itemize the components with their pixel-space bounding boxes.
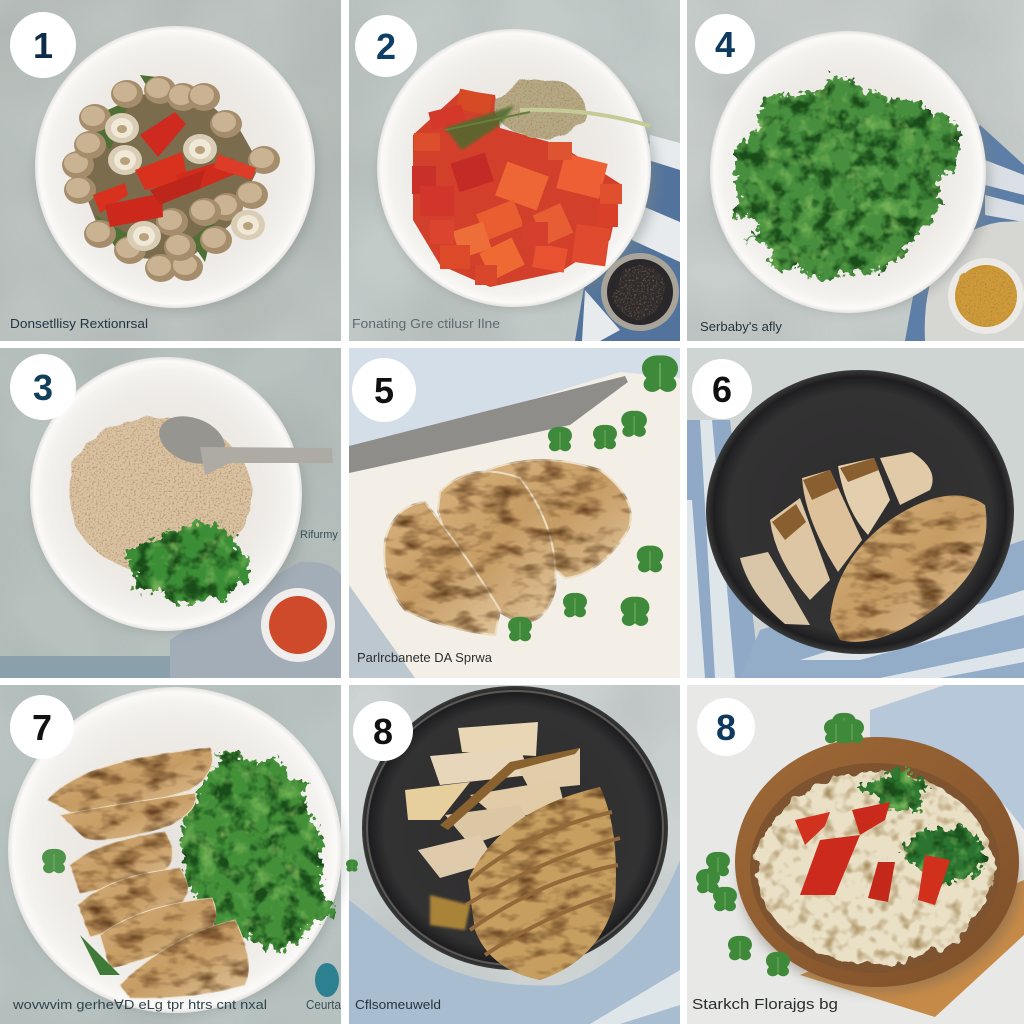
grilled breast [466,787,620,980]
greens [866,774,987,881]
greens [136,528,248,604]
step number [355,15,417,77]
panel: step 2 tomatoes and herbs [349,0,680,341]
panel: step 5 cutting board [349,348,680,678]
striped cloth [687,420,1024,678]
step number: 6 [712,369,732,410]
wood board [800,880,1024,1017]
step number [10,12,76,78]
sliced chicken [384,460,631,635]
step number [353,701,413,761]
mushrooms and peppers [62,75,280,282]
side plate [925,221,1024,341]
step number [692,359,752,419]
side label: Rifurmy [300,529,338,541]
step number [697,698,755,756]
step number [352,358,416,422]
bowl [377,29,651,307]
tomatoes [412,89,622,287]
slices [740,452,933,625]
sauce dish [261,588,335,662]
caption: Fonating Gre ctilusr Ilne [352,316,500,331]
step number [10,695,74,759]
panel: step 8 grilled chicken in pan [346,685,680,1024]
striped cloth [905,125,1024,341]
parsley garnish [696,713,864,976]
step number: 7 [32,707,52,748]
panel: step 7 chicken and greens bowl [0,685,344,1024]
striped cloth [575,130,680,341]
mustard dish [948,258,1024,334]
caption: Donsetllisy Rextionrsal [10,316,148,331]
step number: 8 [716,707,736,748]
greens [182,755,326,950]
spoon [153,408,333,475]
wood bowl [735,737,1019,987]
small dish [601,253,679,331]
blue cloth [349,348,680,470]
herbs in pan [430,895,470,930]
side label: Ceurta [306,997,342,1012]
teal mark [315,963,339,997]
panel: step 3 breadcrumbs [0,348,341,678]
leaf [346,859,358,872]
step number: 1 [33,25,53,66]
pan [706,370,1014,654]
peppers [795,802,950,905]
breadcrumbs [68,417,252,573]
caption: Serbaby's afly [700,319,782,334]
panel: step 1 mushrooms and peppers [0,0,341,341]
caption: Parlrcbanete DA Sprwa [357,650,493,665]
gray cloth [170,562,341,678]
panel: final bowl [687,685,1024,1024]
step number: 3 [33,367,53,408]
bowl [8,687,342,1013]
blue cloth [349,860,680,1024]
rim over caption: wovwvim gerheⱯD eLg tpr htrs cnt nxal [12,997,267,1012]
bowl [710,31,986,313]
step number: 2 [376,26,396,67]
caption: Starkch Florajgs bg [692,996,838,1013]
slices [405,722,580,878]
basil leaves [508,355,678,641]
knife [349,376,628,473]
panel: step 6 pan with chicken [687,348,1024,678]
bowl [35,26,315,308]
blue cloth [870,685,1024,830]
step number [695,14,755,74]
small leaves [42,849,120,975]
step number [10,354,76,420]
pan [362,686,668,970]
chicken pieces [48,748,248,998]
step number: 5 [374,370,394,411]
panel: step 4 leafy greens [687,0,1024,341]
step number: 4 [715,24,735,65]
seared breast [830,495,987,642]
rice [757,772,993,964]
greens [732,82,959,278]
caption: Cflsomeuweld [355,997,441,1012]
bowl [30,357,302,631]
step number: 8 [373,711,393,752]
herb sprig [445,78,650,150]
